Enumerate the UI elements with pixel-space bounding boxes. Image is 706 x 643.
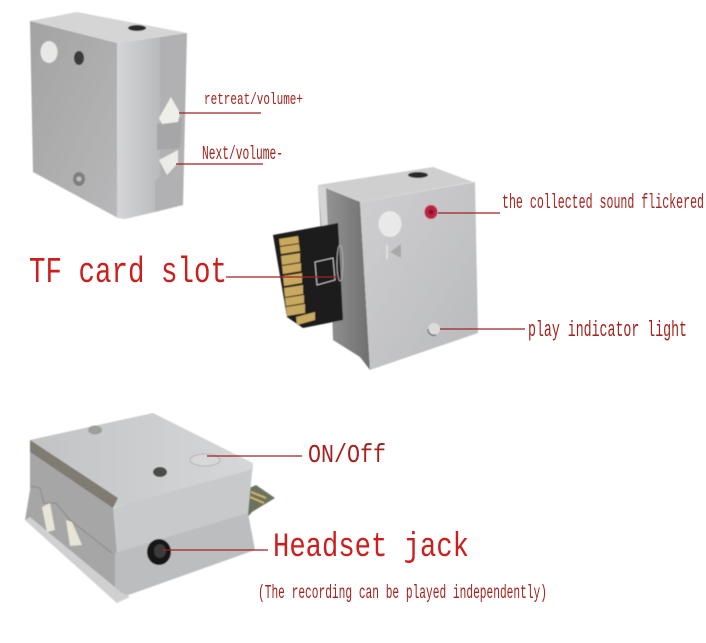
- label: Next/volume-: Next/volume-: [202, 143, 283, 165]
- leader lines: [163, 113, 525, 550]
- memory card: [273, 223, 343, 328]
- device: base with headset jack: [25, 413, 275, 603]
- label: Headset jack: Headset jack: [273, 529, 469, 567]
- device: memory card side with indicator lights: [273, 167, 478, 370]
- label: ON/Off: ON/Off: [308, 440, 386, 470]
- label: TF card slot: TF card slot: [29, 252, 227, 293]
- device: top view with volume buttons: [30, 12, 187, 219]
- label: retreat/volume+: retreat/volume+: [204, 91, 303, 110]
